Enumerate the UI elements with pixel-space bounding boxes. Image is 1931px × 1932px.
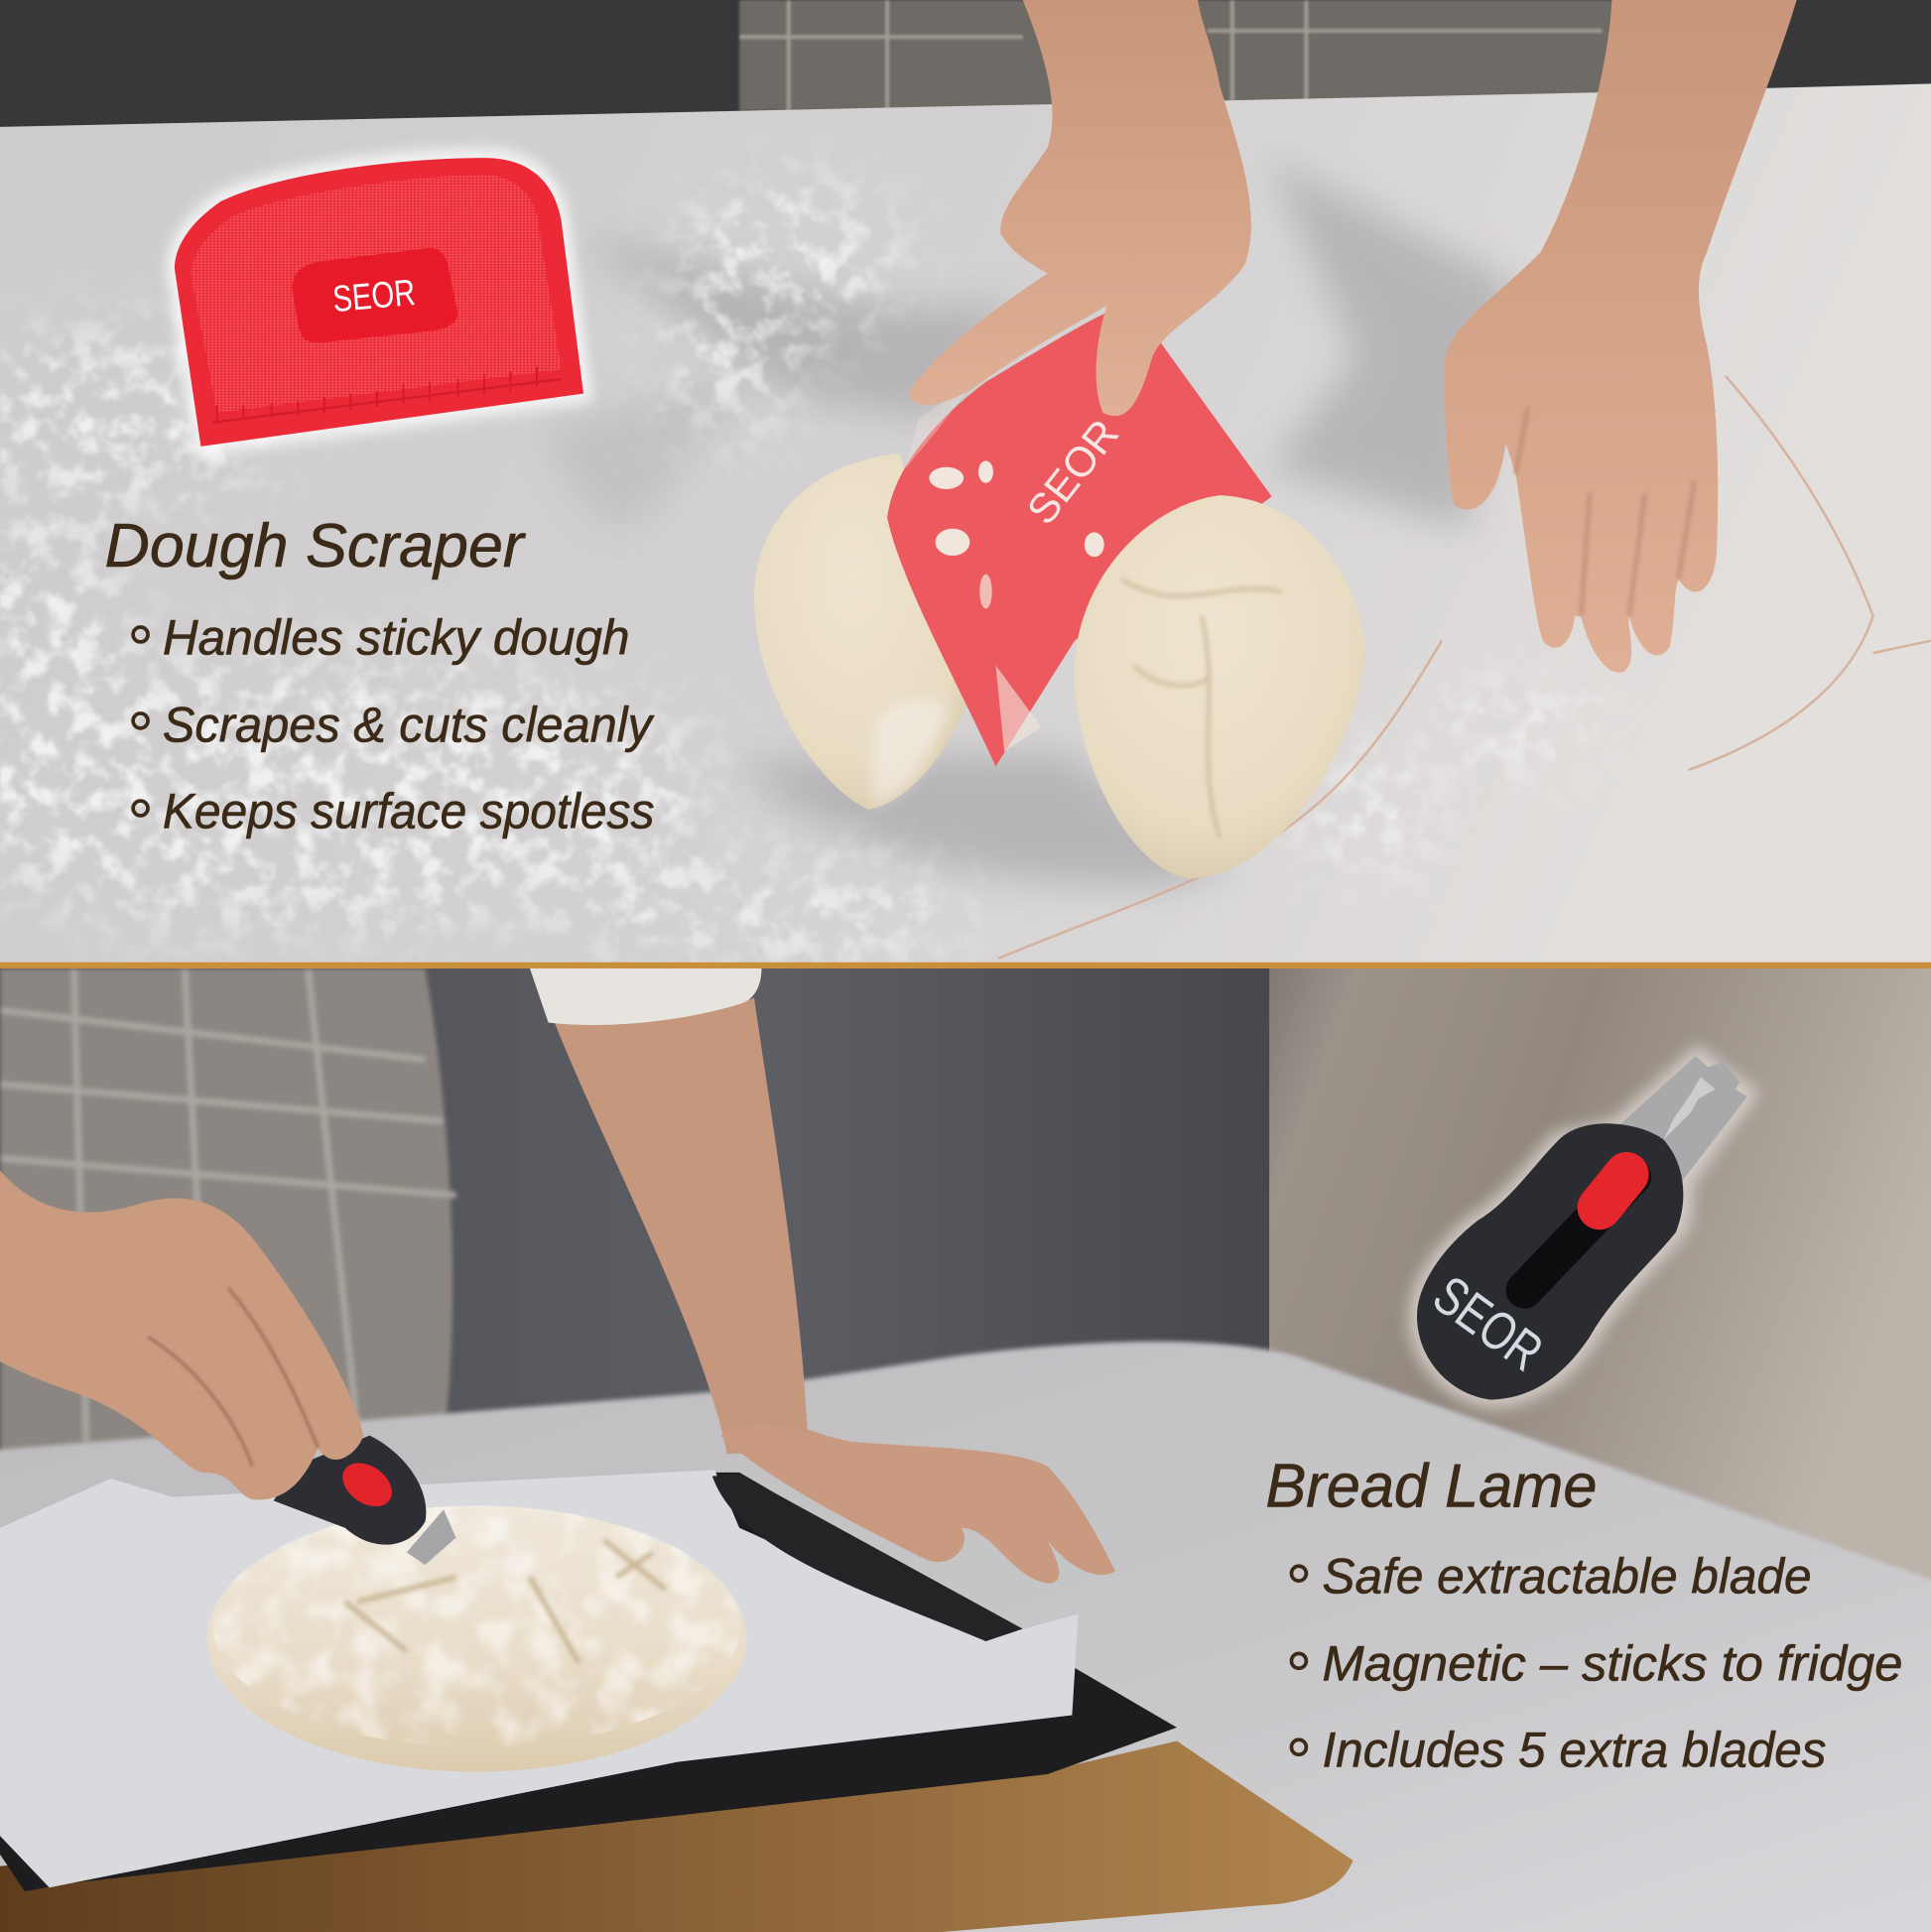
- text block: bread lame: [1265, 1453, 1902, 1778]
- right hand on counter: [1444, 0, 1797, 673]
- grey wall: [0, 968, 1282, 1486]
- scraper body: [175, 158, 583, 447]
- blade: [1616, 1056, 1747, 1189]
- bullet list: Includes 5 extra blades: [1323, 1723, 1826, 1778]
- right dough piece: [1075, 495, 1365, 878]
- mesh texture: [191, 175, 562, 413]
- arm and sleeve: [530, 968, 862, 1454]
- baking tray: [0, 1473, 1177, 1891]
- hand on table: [720, 1426, 1115, 1584]
- panel: bread lame photo: [0, 968, 1931, 1932]
- hand with lame: [0, 1171, 363, 1499]
- flour dusting: [213, 1506, 739, 1746]
- counter shadows: [542, 160, 1515, 887]
- marble counter: [0, 83, 1931, 963]
- bullet list: Handles sticky dough: [163, 609, 630, 665]
- bullet list: [133, 609, 655, 838]
- glow: [1417, 1056, 1747, 1400]
- left hand holding scraper: [909, 0, 1251, 416]
- apron: [0, 968, 455, 1460]
- tray inner rim: [712, 1474, 1023, 1641]
- left dough piece: [754, 453, 973, 810]
- marble veins: [998, 376, 1931, 959]
- ruler: [213, 367, 562, 424]
- cutting board: [0, 1741, 1353, 1932]
- dark kitchen background: [0, 0, 1931, 148]
- handle: [1417, 1123, 1683, 1400]
- baking paper: [0, 1470, 1079, 1887]
- scraper logo text: SEOR: [331, 271, 417, 320]
- slot: [1524, 1177, 1632, 1290]
- lame in hand: [274, 1436, 455, 1565]
- flour texture: [0, 165, 1564, 963]
- scored bread loaf: [206, 1506, 746, 1772]
- logo patch: [292, 248, 458, 343]
- red slider: [1600, 1174, 1626, 1208]
- product: dough scraper: [175, 158, 583, 447]
- panel: dough scraper photo: [0, 0, 1931, 973]
- bullet list: Magnetic – sticks to fridge: [1323, 1636, 1902, 1692]
- scraper logo: SEOR: [1018, 411, 1127, 533]
- divider: [0, 963, 1931, 968]
- heading: Dough Scraper: [105, 512, 526, 580]
- lame logo text: SEOR: [1423, 1264, 1554, 1383]
- red scraper in use: [887, 302, 1272, 766]
- bullet list: Keeps surface spotless: [163, 783, 654, 838]
- white glow: [175, 158, 583, 447]
- bullet list: Scrapes & cuts cleanly: [163, 698, 655, 753]
- bullet list: [1291, 1549, 1902, 1778]
- heading: Bread Lame: [1265, 1453, 1597, 1521]
- text block: dough scraper: [105, 512, 655, 838]
- curtain: [1269, 968, 1931, 1610]
- table: [0, 1342, 1931, 1932]
- apron behind counter: [739, 0, 1614, 111]
- product: bread lame: [1417, 1056, 1747, 1400]
- bullet list: Safe extractable blade: [1323, 1549, 1812, 1605]
